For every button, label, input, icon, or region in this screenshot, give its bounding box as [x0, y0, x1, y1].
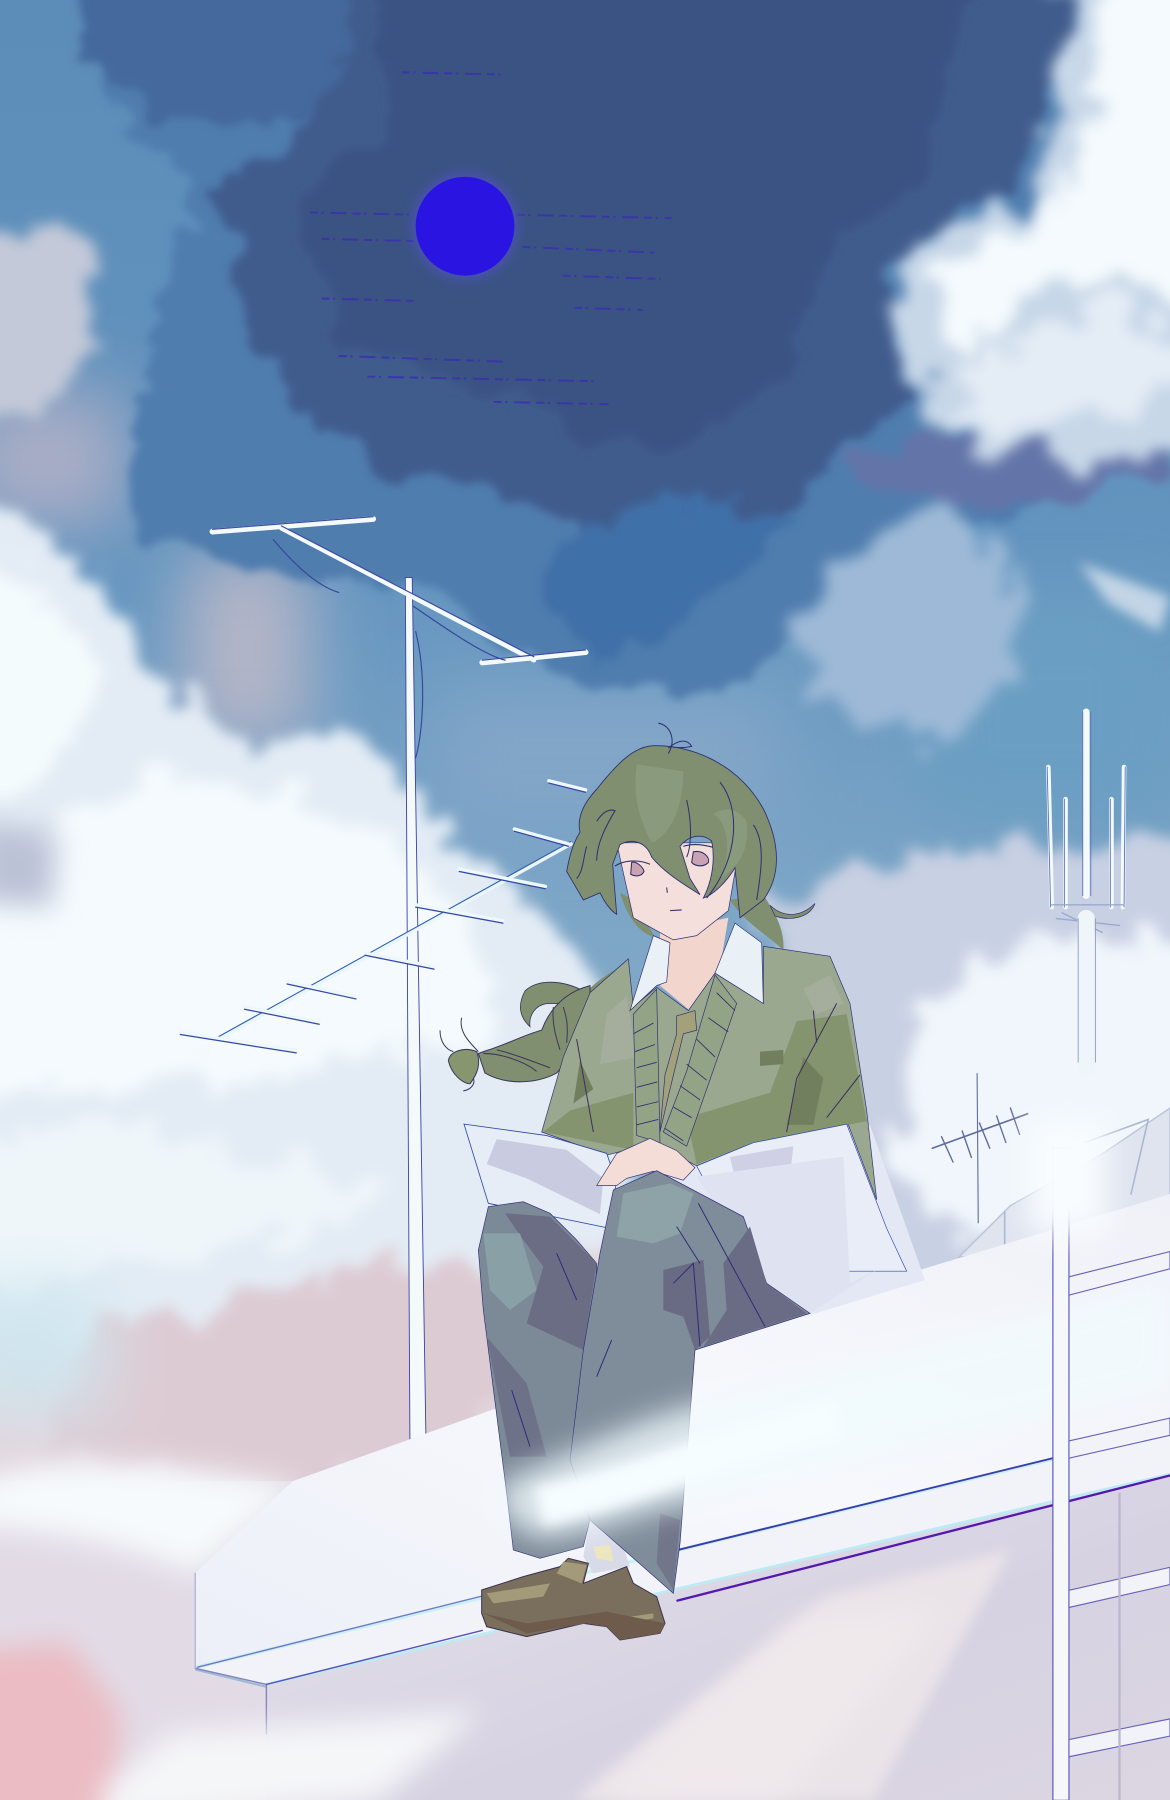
right low cloud highlight [896, 933, 1170, 1252]
wall [266, 1470, 1170, 1800]
tie [660, 1011, 697, 1132]
upper-left dark cloud lobe [80, 0, 390, 126]
ledge lines [195, 1430, 1170, 1734]
white sleeve right [697, 1124, 907, 1271]
back hair and ponytail [620, 893, 815, 950]
lower left haze [0, 1481, 293, 1800]
antenna: small far antenna and dish [932, 1074, 1170, 1257]
distant wisp [1079, 563, 1170, 632]
neck [660, 918, 728, 1011]
top-right white cloud [919, 0, 1170, 344]
top-right white cloud shading [896, 0, 1170, 459]
bottom light leaks [103, 1607, 942, 1800]
white haze streak [0, 1463, 299, 1573]
character: upper body and head [440, 723, 907, 1271]
soft tone patches [0, 390, 1170, 827]
antenna: right tower [1047, 712, 1125, 1068]
large left cloud shade [0, 503, 620, 1366]
pink glow [0, 1642, 121, 1800]
right low cloud [769, 839, 1170, 1286]
collar [630, 923, 763, 1011]
rooftop building [0, 1194, 1170, 1800]
wall light bands [574, 1550, 1010, 1800]
sun [412, 173, 518, 279]
darkest cloud core [299, 0, 987, 459]
white sleeve left [464, 1124, 617, 1228]
lower yagi [180, 781, 586, 1053]
mast [405, 578, 426, 1441]
placket right [663, 975, 737, 1146]
light streak across legs [499, 1280, 1170, 1539]
second rail [1118, 1493, 1120, 1800]
left cloud lower glow [0, 1134, 390, 1297]
left cloud lilac patch [0, 821, 57, 907]
ladder rungs [1069, 1252, 1170, 1757]
face [617, 843, 740, 940]
character: legs and shoes [478, 1157, 877, 1640]
sock highlight [593, 1545, 613, 1562]
cardigan [542, 946, 877, 1200]
lower blue cloud [540, 505, 804, 654]
dark storm cloud [218, 0, 1114, 586]
ledge top [195, 1194, 1170, 1668]
ladder glow [1028, 1119, 1108, 1234]
mid-right pale cloud [804, 517, 1016, 735]
placket left [633, 989, 660, 1143]
large left cloud body glow [0, 781, 488, 1102]
glitch speckles [310, 72, 672, 404]
ledge front [195, 1432, 1170, 1686]
blue sun and glitches [310, 72, 672, 404]
lower right streak [597, 1607, 942, 1800]
white cloth backing under hands [600, 1125, 925, 1320]
upper yagi [212, 517, 586, 758]
shirt [655, 989, 690, 1078]
white sleeve lower [697, 1157, 877, 1313]
hands [597, 1138, 695, 1186]
sock [583, 1520, 630, 1573]
large left cloud highlights [0, 550, 103, 815]
shoe [482, 1558, 665, 1640]
rear leg [478, 1202, 597, 1558]
left blue glow [0, 1286, 103, 1412]
front hair [567, 723, 776, 918]
pink lower cloud [34, 1240, 551, 1493]
ladder [1028, 1119, 1170, 1800]
eyes and mouth [615, 845, 725, 911]
top-right cloud lower glow [953, 299, 1170, 436]
lower sky base [0, 1217, 666, 1539]
antenna: mast with two yagi arrays [180, 517, 586, 1441]
ladder rails [1053, 1148, 1069, 1800]
braid [440, 962, 627, 1091]
purple band under cloud [850, 425, 1170, 505]
mid blue cloud mass [69, 0, 1148, 700]
front leg [512, 1171, 810, 1593]
lower left streak [103, 1711, 482, 1800]
upper-left pale cloud [0, 218, 98, 425]
cardigan shadows [543, 1014, 867, 1164]
